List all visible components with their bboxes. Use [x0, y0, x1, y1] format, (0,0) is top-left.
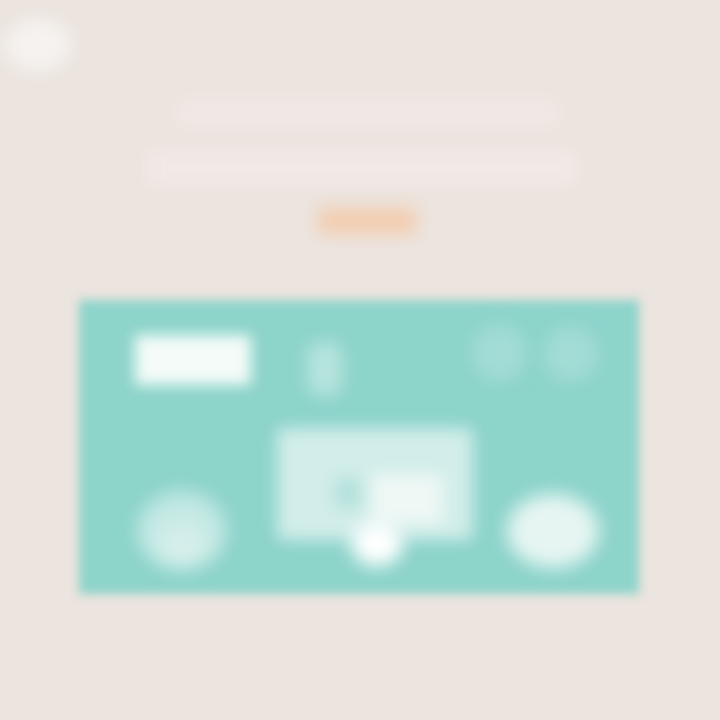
- panel background: [79, 300, 639, 594]
- faint circle icon right: [543, 326, 599, 382]
- card inner bright block: [371, 474, 443, 524]
- title line 2: [146, 150, 578, 186]
- title line 1: [176, 98, 560, 128]
- small vertical icon: [308, 342, 342, 396]
- central card: [277, 428, 473, 540]
- faint circle icon left: [471, 324, 527, 382]
- white label box: [135, 335, 251, 385]
- panel: teal main panel: [72, 293, 646, 601]
- map pin pointer: [351, 522, 403, 566]
- logo: [4, 18, 72, 72]
- card inner darker mark: [335, 478, 361, 508]
- right round icon: [507, 494, 599, 568]
- left round icon: [137, 490, 227, 570]
- subtitle accent: [318, 208, 416, 234]
